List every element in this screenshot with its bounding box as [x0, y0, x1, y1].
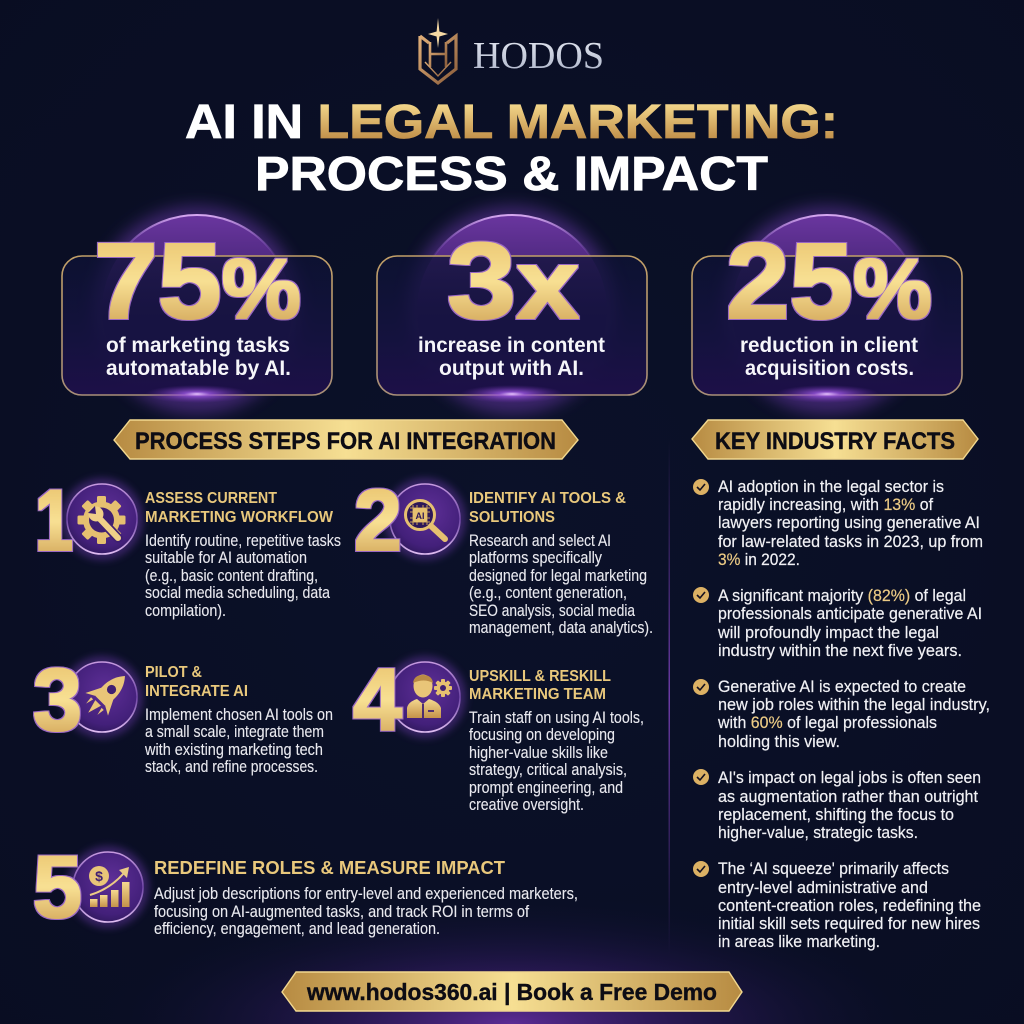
step text: (e.g., basic content drafting, — [145, 566, 318, 585]
fact text: will profoundly impact the legal — [717, 623, 939, 642]
heading banner: process steps — [114, 420, 578, 459]
fact text: in areas like marketing. — [718, 932, 880, 951]
fact text: for law-related tasks in 2023, up from — [718, 532, 983, 551]
title: PROCESS & IMPACT — [255, 148, 768, 201]
step text: management, data analytics). — [469, 618, 653, 637]
step heading — [469, 490, 626, 526]
stat number: 3x — [447, 220, 579, 341]
step text — [469, 708, 644, 814]
fact text: industry within the next five years. — [718, 641, 962, 660]
step heading: REDEFINE ROLES & MEASURE IMPACT — [154, 857, 506, 878]
step number: 3 — [33, 650, 82, 749]
fact text: 3% in 2022. — [718, 550, 800, 569]
fact 5 — [693, 859, 981, 951]
fact text: higher-value, strategic tasks. — [718, 823, 918, 842]
icon: AI chip and magnifier — [384, 478, 466, 560]
panel: stat 3x — [377, 206, 647, 414]
step heading: MARKETING TEAM — [469, 686, 606, 703]
step 2 — [354, 473, 653, 637]
step text: efficiency, engagement, and lead generation. — [154, 919, 440, 938]
step heading: UPSKILL & RESKILL — [469, 668, 611, 685]
fact text: lawyers reporting using generative AI — [718, 513, 980, 532]
fact text: professionals anticipate generative AI — [718, 604, 982, 623]
fact text: AI adoption in the legal sector is — [718, 477, 944, 496]
step text: (e.g., content generation, — [469, 583, 627, 602]
fact text: replacement, shifting the focus to — [718, 805, 954, 824]
step text — [145, 531, 341, 620]
title — [185, 96, 838, 201]
stat label: acquisition costs. — [745, 357, 914, 380]
fact text: rapidly increasing, with 13% of — [718, 495, 933, 514]
step text: suitable for AI automation — [145, 548, 307, 567]
call to action banner — [282, 972, 742, 1011]
step text: higher-value skills like — [469, 743, 608, 762]
fact 4 — [693, 768, 981, 842]
icon: coin and growth chart: $ — [95, 868, 103, 884]
stat label: output with AI. — [439, 357, 584, 380]
step text: a small scale, integrate them — [145, 722, 324, 741]
icon: gear and wrench — [61, 478, 143, 560]
fact text — [718, 477, 983, 569]
fact text: new job roles within the legal industry, — [718, 695, 990, 714]
call to action banner: www.hodos360.ai | Book a Free Demo — [306, 979, 717, 1005]
step text: Adjust job descriptions for entry-level and experienced marketers, — [154, 884, 578, 903]
stat label — [106, 334, 291, 380]
step text: Identify routine, repetitive tasks — [145, 531, 341, 550]
panel: stat 25% — [692, 206, 962, 414]
icon: check badge — [693, 587, 709, 603]
fact text — [718, 859, 981, 951]
icon: coin and growth chart — [67, 846, 149, 928]
step text: Implement chosen AI tools on — [145, 705, 333, 724]
stat number: 75% — [94, 220, 301, 341]
fact 1 — [693, 477, 983, 569]
stat label: automatable by AI. — [106, 357, 291, 380]
stat label — [418, 334, 605, 380]
fact text — [717, 677, 990, 751]
fact text: AI's impact on legal jobs is often seen — [718, 768, 981, 787]
step 5 — [33, 837, 578, 938]
icon: shield with star — [420, 18, 456, 83]
step text — [469, 531, 653, 637]
title: AI IN LEGAL MARKETING: — [185, 96, 838, 149]
fact text: initial skill sets required for new hires — [718, 914, 980, 933]
fact text — [718, 768, 981, 842]
step heading: SOLUTIONS — [469, 509, 555, 526]
step text: prompt engineering, and — [469, 778, 623, 797]
step text: SEO analysis, social media — [469, 601, 635, 620]
icon: check badge — [693, 479, 709, 495]
step text: creative oversight. — [469, 795, 584, 814]
fact text: holding this view. — [718, 732, 840, 751]
step text: strategy, critical analysis, — [469, 760, 627, 779]
stat number: 25% — [726, 220, 932, 341]
stat label — [740, 334, 918, 380]
step text: with existing marketing tech — [144, 740, 323, 759]
fact text: The ‘AI squeeze' primarily affects — [718, 859, 949, 878]
wordmark: HODOS — [473, 35, 604, 77]
step text — [154, 884, 578, 938]
step heading: INTEGRATE AI — [145, 683, 248, 700]
icon: AI chip and magnifier: AI — [416, 511, 424, 521]
step number: 2 — [354, 473, 402, 569]
step 4 — [353, 650, 644, 814]
step heading — [145, 664, 248, 700]
step text: focusing on AI-augmented tasks, and track ROI in terms of — [154, 902, 529, 921]
panel: stat 75% — [62, 206, 332, 414]
heading banner: key industry facts: KEY INDUSTRY FACTS — [715, 428, 955, 455]
fact 3 — [693, 677, 990, 751]
step text: focusing on developing — [469, 725, 615, 744]
step number: 5 — [33, 837, 82, 936]
step heading: ASSESS CURRENT — [145, 490, 277, 507]
fact text: with 60% of legal professionals — [717, 713, 937, 732]
heading banner: process steps: PROCESS STEPS FOR AI INTEGRATION — [135, 428, 556, 455]
heading banner: key industry facts — [692, 420, 978, 459]
step text: platforms specifically — [469, 548, 602, 567]
icon: person with gear — [384, 656, 466, 738]
step text — [144, 705, 333, 776]
step heading: IDENTIFY AI TOOLS & — [469, 490, 626, 507]
step text: designed for legal marketing — [469, 566, 647, 585]
step number: 1 — [35, 473, 73, 569]
icon: check badge — [693, 769, 709, 785]
step 3 — [33, 650, 333, 776]
step number: 4 — [353, 650, 402, 749]
step text: Research and select AI — [469, 531, 611, 550]
fact text: content-creation roles, redefining the — [718, 896, 981, 915]
fact text — [717, 586, 982, 660]
fact text: A significant majority (82%) of legal — [718, 586, 966, 605]
stat label: of marketing tasks — [106, 334, 290, 357]
step heading — [145, 490, 333, 526]
fact text: entry-level administrative and — [718, 878, 928, 897]
fact text: Generative AI is expected to create — [718, 677, 966, 696]
step heading: MARKETING WORKFLOW — [145, 509, 333, 526]
step text: Train staff on using AI tools, — [469, 708, 644, 727]
step text: stack, and refine processes. — [145, 757, 318, 776]
step 1 — [35, 473, 341, 620]
logo: Hodos — [420, 18, 604, 83]
stat label: reduction in client — [740, 334, 918, 357]
step heading — [469, 668, 611, 703]
step text: compilation). — [145, 601, 226, 620]
fact 2 — [693, 586, 982, 660]
step text: social media scheduling, data — [145, 583, 330, 602]
icon: check badge — [693, 861, 709, 877]
fact text: as augmentation rather than outright — [718, 787, 978, 806]
stat label: increase in content — [418, 334, 605, 357]
icon: rocket — [61, 656, 143, 738]
icon: check badge — [693, 679, 709, 695]
step heading: PILOT & — [145, 664, 202, 681]
